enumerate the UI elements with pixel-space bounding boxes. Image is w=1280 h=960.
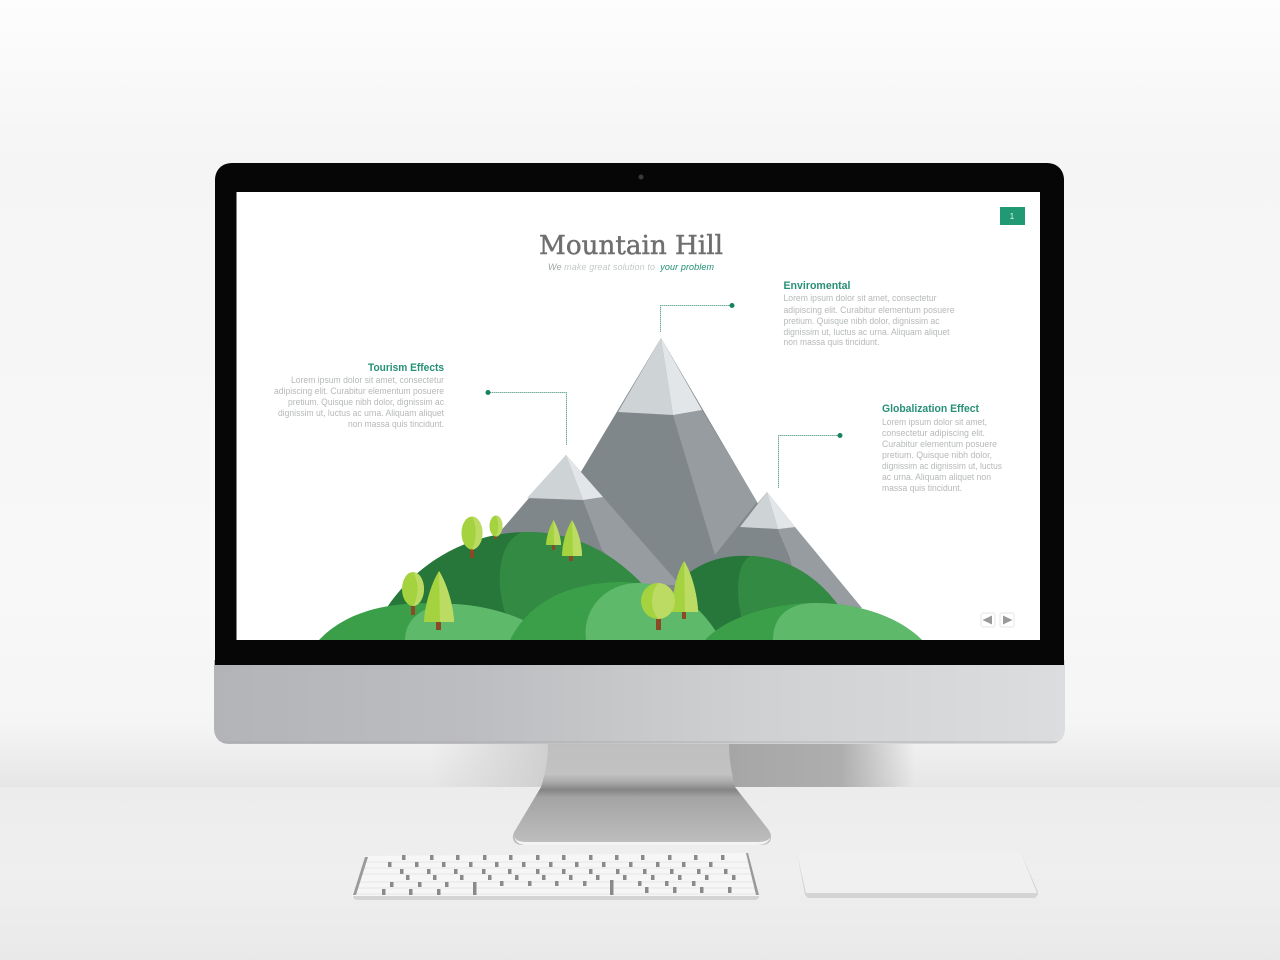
tree: small cone pair bbox=[546, 520, 582, 561]
monitor stand bbox=[513, 744, 771, 845]
text block: Globalization Effect: Curabitur elementum posuere bbox=[882, 439, 997, 449]
page number badge bbox=[1000, 207, 1025, 225]
text block: Globalization Effect: Globalization Effect bbox=[882, 403, 979, 415]
hills: back left bbox=[380, 532, 642, 640]
stand base highlight bbox=[514, 836, 771, 845]
tree: small round bbox=[490, 516, 502, 539]
text block: Enviromental: dignissim ut, luctus ac urna. Aliquam aliquet bbox=[784, 327, 950, 337]
text block: Tourism Effects: Tourism Effects bbox=[368, 362, 444, 374]
background: desk bbox=[0, 787, 1280, 960]
tree: round left top bbox=[462, 516, 482, 558]
page number badge: 1 bbox=[1010, 212, 1015, 221]
hills: front left bbox=[319, 603, 535, 640]
hills: front middle bbox=[510, 582, 721, 640]
webcam bbox=[638, 174, 644, 180]
text block: Enviromental: Enviromental bbox=[784, 280, 850, 292]
text block: Globalization Effect: pretium. Quisque nibh dolor, bbox=[882, 450, 992, 460]
connector: Globalization Effect bbox=[778, 433, 842, 488]
text block: Globalization Effect bbox=[882, 403, 1002, 493]
text block: Enviromental: Lorem ipsum dolor sit amet, consectetur bbox=[784, 293, 936, 303]
text block: Globalization Effect: Lorem ipsum dolor sit amet, bbox=[882, 417, 987, 427]
title: Mountain Hill bbox=[539, 231, 723, 261]
mountain: large peak bbox=[545, 338, 800, 600]
trackpad bbox=[797, 853, 1038, 902]
text block: Enviromental: adipiscing elit. Curabitur elementum posuere bbox=[784, 305, 954, 315]
text block: Tourism Effects: adipiscing elit. Curabitur elementum posuere bbox=[274, 386, 444, 396]
text block: Tourism Effects: dignissim ut, luctus ac urna. Aliquam aliquet bbox=[278, 408, 444, 418]
hills: front right bbox=[705, 603, 922, 640]
slide screen bbox=[236, 192, 1040, 640]
text block: Enviromental: non massa quis tincidunt. bbox=[784, 337, 880, 347]
text block: Enviromental bbox=[784, 280, 954, 347]
text block: Enviromental: pretium. Quisque nibh dolor, dignissim ac bbox=[784, 316, 940, 326]
monitor bbox=[214, 163, 1065, 744]
tree: round center bbox=[641, 583, 675, 630]
text block: Tourism Effects: Lorem ipsum dolor sit amet, consectetur bbox=[291, 375, 444, 385]
tree: round left bottom bbox=[402, 572, 424, 615]
connector: Enviromental bbox=[660, 303, 734, 332]
text block: Tourism Effects bbox=[274, 362, 444, 429]
connector: Tourism Effects bbox=[486, 390, 566, 445]
text block: Globalization Effect: massa quis tincidunt. bbox=[882, 483, 962, 493]
hills: back right bbox=[680, 556, 838, 640]
navigation buttons bbox=[981, 613, 1014, 627]
monitor bezel bbox=[215, 163, 1064, 665]
keyboard bbox=[352, 853, 759, 903]
monitor shadow on wall bbox=[430, 744, 915, 787]
tree: cone center bbox=[672, 561, 698, 619]
text block: Tourism Effects: pretium. Quisque nibh dolor, dignissim ac bbox=[288, 397, 444, 407]
subtitle: We make great solution to your problem bbox=[548, 262, 714, 272]
text block: Globalization Effect: ac urna. Aliquam aliquet non bbox=[882, 472, 991, 482]
mountain: right peak bbox=[700, 492, 862, 608]
monitor chin bbox=[214, 660, 1065, 744]
text block: Globalization Effect: dignissim ac dignissim ut, luctus bbox=[882, 461, 1002, 471]
mountain: left peak bbox=[480, 455, 680, 600]
text block: Tourism Effects: non massa quis tincidunt. bbox=[348, 419, 444, 429]
tree: cone left bottom bbox=[424, 571, 454, 630]
text block: Globalization Effect: consectetur adipiscing elit. bbox=[882, 428, 985, 438]
